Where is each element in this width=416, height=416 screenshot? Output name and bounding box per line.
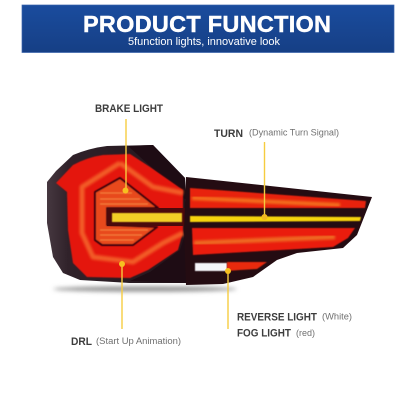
callout: fog light: (red) <box>296 328 315 338</box>
subtitle: 5function lights, innovative look <box>128 36 280 48</box>
callout: DRL: (Start Up Animation) <box>96 336 181 346</box>
callout: DRL <box>71 261 181 348</box>
left tail lamp <box>47 145 188 283</box>
callout: reverse light: REVERSE LIGHT <box>237 312 317 324</box>
brake light block <box>95 178 158 245</box>
callout: turn: (Dynamic Turn Signal) <box>249 128 339 138</box>
red lens <box>56 154 183 278</box>
upper orange stripe <box>192 198 340 205</box>
right tail lamp <box>184 177 372 285</box>
banner <box>22 5 394 52</box>
yellow strip left <box>112 213 182 222</box>
fog light <box>227 262 267 271</box>
upper red lens <box>190 188 366 208</box>
lower dark corner <box>130 232 188 283</box>
orange DRL contour <box>82 163 183 262</box>
ground shadow <box>53 286 237 292</box>
callout: brake light: BRAKE LIGHT <box>95 103 163 115</box>
callout: brake light <box>95 103 163 194</box>
turn signal strip <box>190 216 361 222</box>
callout: DRL: DRL <box>71 336 92 348</box>
callout: fog light: FOG LIGHT <box>237 328 291 340</box>
title: PRODUCT FUNCTION <box>83 11 331 37</box>
brake louvres <box>100 193 148 240</box>
dark housing <box>47 145 187 283</box>
callout: reverse light: (White) <box>322 312 352 322</box>
housing <box>184 177 372 285</box>
dark channel <box>107 208 185 226</box>
lower red lens <box>192 228 355 255</box>
reverse light <box>195 263 227 271</box>
lower orange stripe <box>194 237 335 243</box>
callout: reverse light <box>225 268 352 329</box>
callout: turn <box>214 128 339 220</box>
callout: turn: TURN <box>214 128 243 140</box>
